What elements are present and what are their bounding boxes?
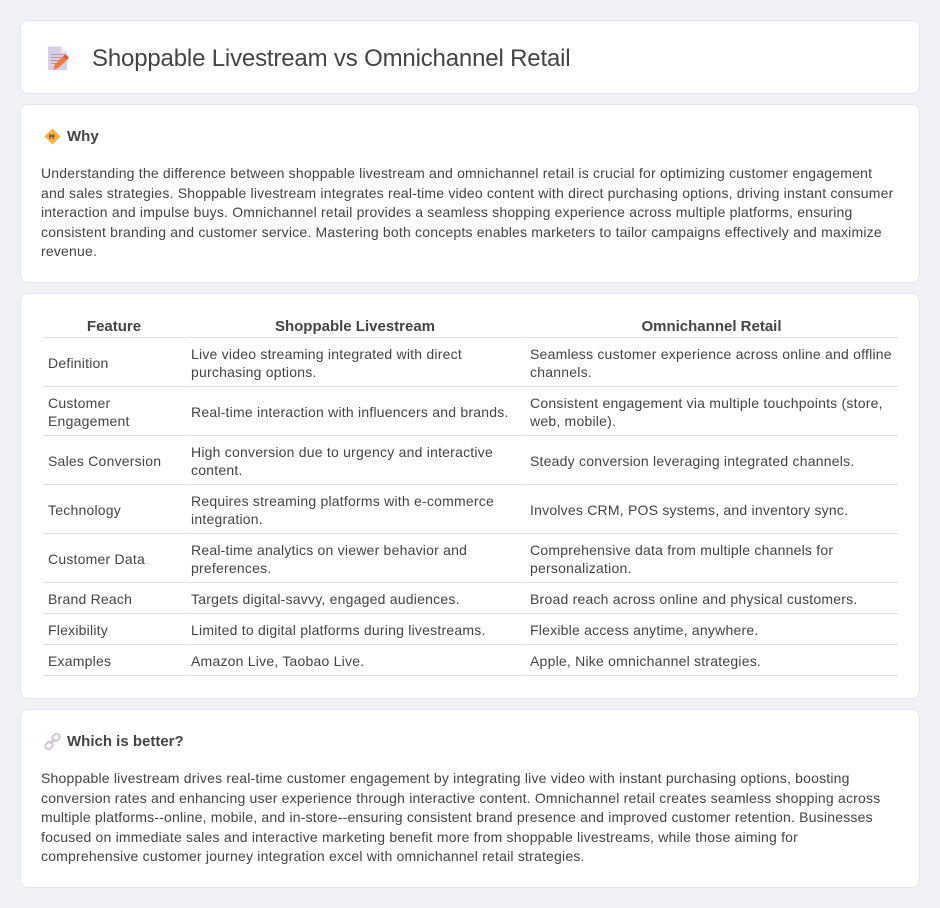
row: customer engagement (48, 395, 883, 429)
text: why paragraph: revenue. (41, 243, 97, 259)
row: technology: Involves CRM, POS systems, and inventory sync. (530, 502, 848, 518)
row: flexibility: Limited to digital platforms during livestreams. (191, 622, 486, 638)
row: brand reach: Targets digital-savvy, engaged audiences. (191, 591, 460, 607)
title: Shoppable Livestream vs Omnichannel Retail (92, 45, 570, 72)
row: customer engagement: Customer (48, 395, 110, 411)
text: which is better paragraph: conversion rates and enhancing user experience through interactive content. Omnichannel retail creates seamless shopping across (41, 790, 880, 806)
text: which is better paragraph: comprehensive customer journey integration excel with omnichannel retail strategies. (41, 848, 585, 864)
row: customer data: Comprehensive data from multiple channels for (530, 542, 833, 558)
row: definition: Live video streaming integrated with direct (191, 346, 462, 362)
panel: which is better (20, 709, 920, 888)
panel: comparison table (20, 293, 920, 699)
row: sales conversion: Steady conversion leveraging integrated channels. (530, 453, 854, 469)
text: which is better paragraph: focused on immediate sales and interactive marketing benefit more from shoppable livestreams, while those aiming for (41, 829, 798, 845)
table header: Feature (87, 318, 141, 335)
text: why paragraph: and sales strategies. Shoppable livestream integrates real-time video content with direct purchasing options, driving instant consumer (41, 185, 893, 201)
row: definition: Seamless customer experience across online and offline (530, 346, 892, 362)
row: brand reach: Brand Reach (48, 591, 132, 607)
row: definition: purchasing options. (191, 364, 317, 380)
row: customer data: personalization. (530, 560, 632, 576)
row: technology (48, 493, 848, 527)
row: examples: Examples (48, 653, 111, 669)
text: why paragraph: Understanding the difference between shoppable livestream and omnichannel retail is crucial for optimizing customer engagement (41, 165, 872, 181)
heading: which is better: Which is better? (67, 733, 184, 750)
row: flexibility: Flexibility (48, 622, 108, 638)
table header: Shoppable Livestream (275, 318, 435, 335)
heading: why: Why (67, 128, 99, 145)
row: examples: Amazon Live, Taobao Live. (191, 653, 364, 669)
row: sales conversion (48, 444, 854, 478)
row: definition: Definition (48, 355, 109, 371)
row: customer data: preferences. (191, 560, 271, 576)
row: examples (48, 653, 761, 669)
row: brand reach (48, 591, 858, 607)
row: definition (48, 346, 892, 380)
text: why paragraph (41, 165, 894, 259)
icon: warning diamond (44, 128, 60, 144)
row: flexibility (48, 622, 758, 638)
text: which is better paragraph (41, 770, 880, 864)
row: customer data: Real-time analytics on viewer behavior and (191, 542, 467, 558)
row: customer engagement: Consistent engagement via multiple touchpoints (store, (530, 395, 883, 411)
panel: why (20, 104, 920, 283)
row: sales conversion: Sales Conversion (48, 453, 161, 469)
row: brand reach: Broad reach across online and physical customers. (530, 591, 858, 607)
row: customer engagement: web, mobile). (530, 413, 616, 429)
icon: document with pencil (48, 46, 69, 70)
text: which is better paragraph: Shoppable livestream drives real-time customer engagement by integrating live video with instant purchasing options, boosting (41, 770, 850, 786)
row: customer engagement: Real-time interaction with influencers and brands. (191, 404, 509, 420)
row: technology: integration. (191, 511, 263, 527)
row: examples: Apple, Nike omnichannel strategies. (530, 653, 761, 669)
row: technology: Technology (48, 502, 121, 518)
row: definition: channels. (530, 364, 592, 380)
row: technology: Requires streaming platforms with e-commerce (191, 493, 494, 509)
row: customer data (48, 542, 833, 576)
row: sales conversion: content. (191, 462, 243, 478)
table header: Omnichannel Retail (641, 318, 782, 335)
row: sales conversion: High conversion due to urgency and interactive (191, 444, 493, 460)
row: customer data: Customer Data (48, 551, 145, 567)
row: customer engagement: Engagement (48, 413, 130, 429)
table header (87, 318, 782, 335)
text: why paragraph: consistent branding and customer service. Mastering both concepts enables marketers to tailor campaigns effectively and maximize (41, 224, 882, 240)
text: which is better paragraph: multiple platforms--online, mobile, and in-store--ensuring consistent brand presence and improved customer retention. Businesses (41, 809, 873, 825)
text: why paragraph: interaction and impulse buys. Omnichannel retail provides a seamless shopping experience across multiple platforms, ensuring (41, 204, 853, 220)
icon: chain link (44, 733, 61, 750)
row: flexibility: Flexible access anytime, anywhere. (530, 622, 758, 638)
panel: title header (20, 20, 920, 94)
